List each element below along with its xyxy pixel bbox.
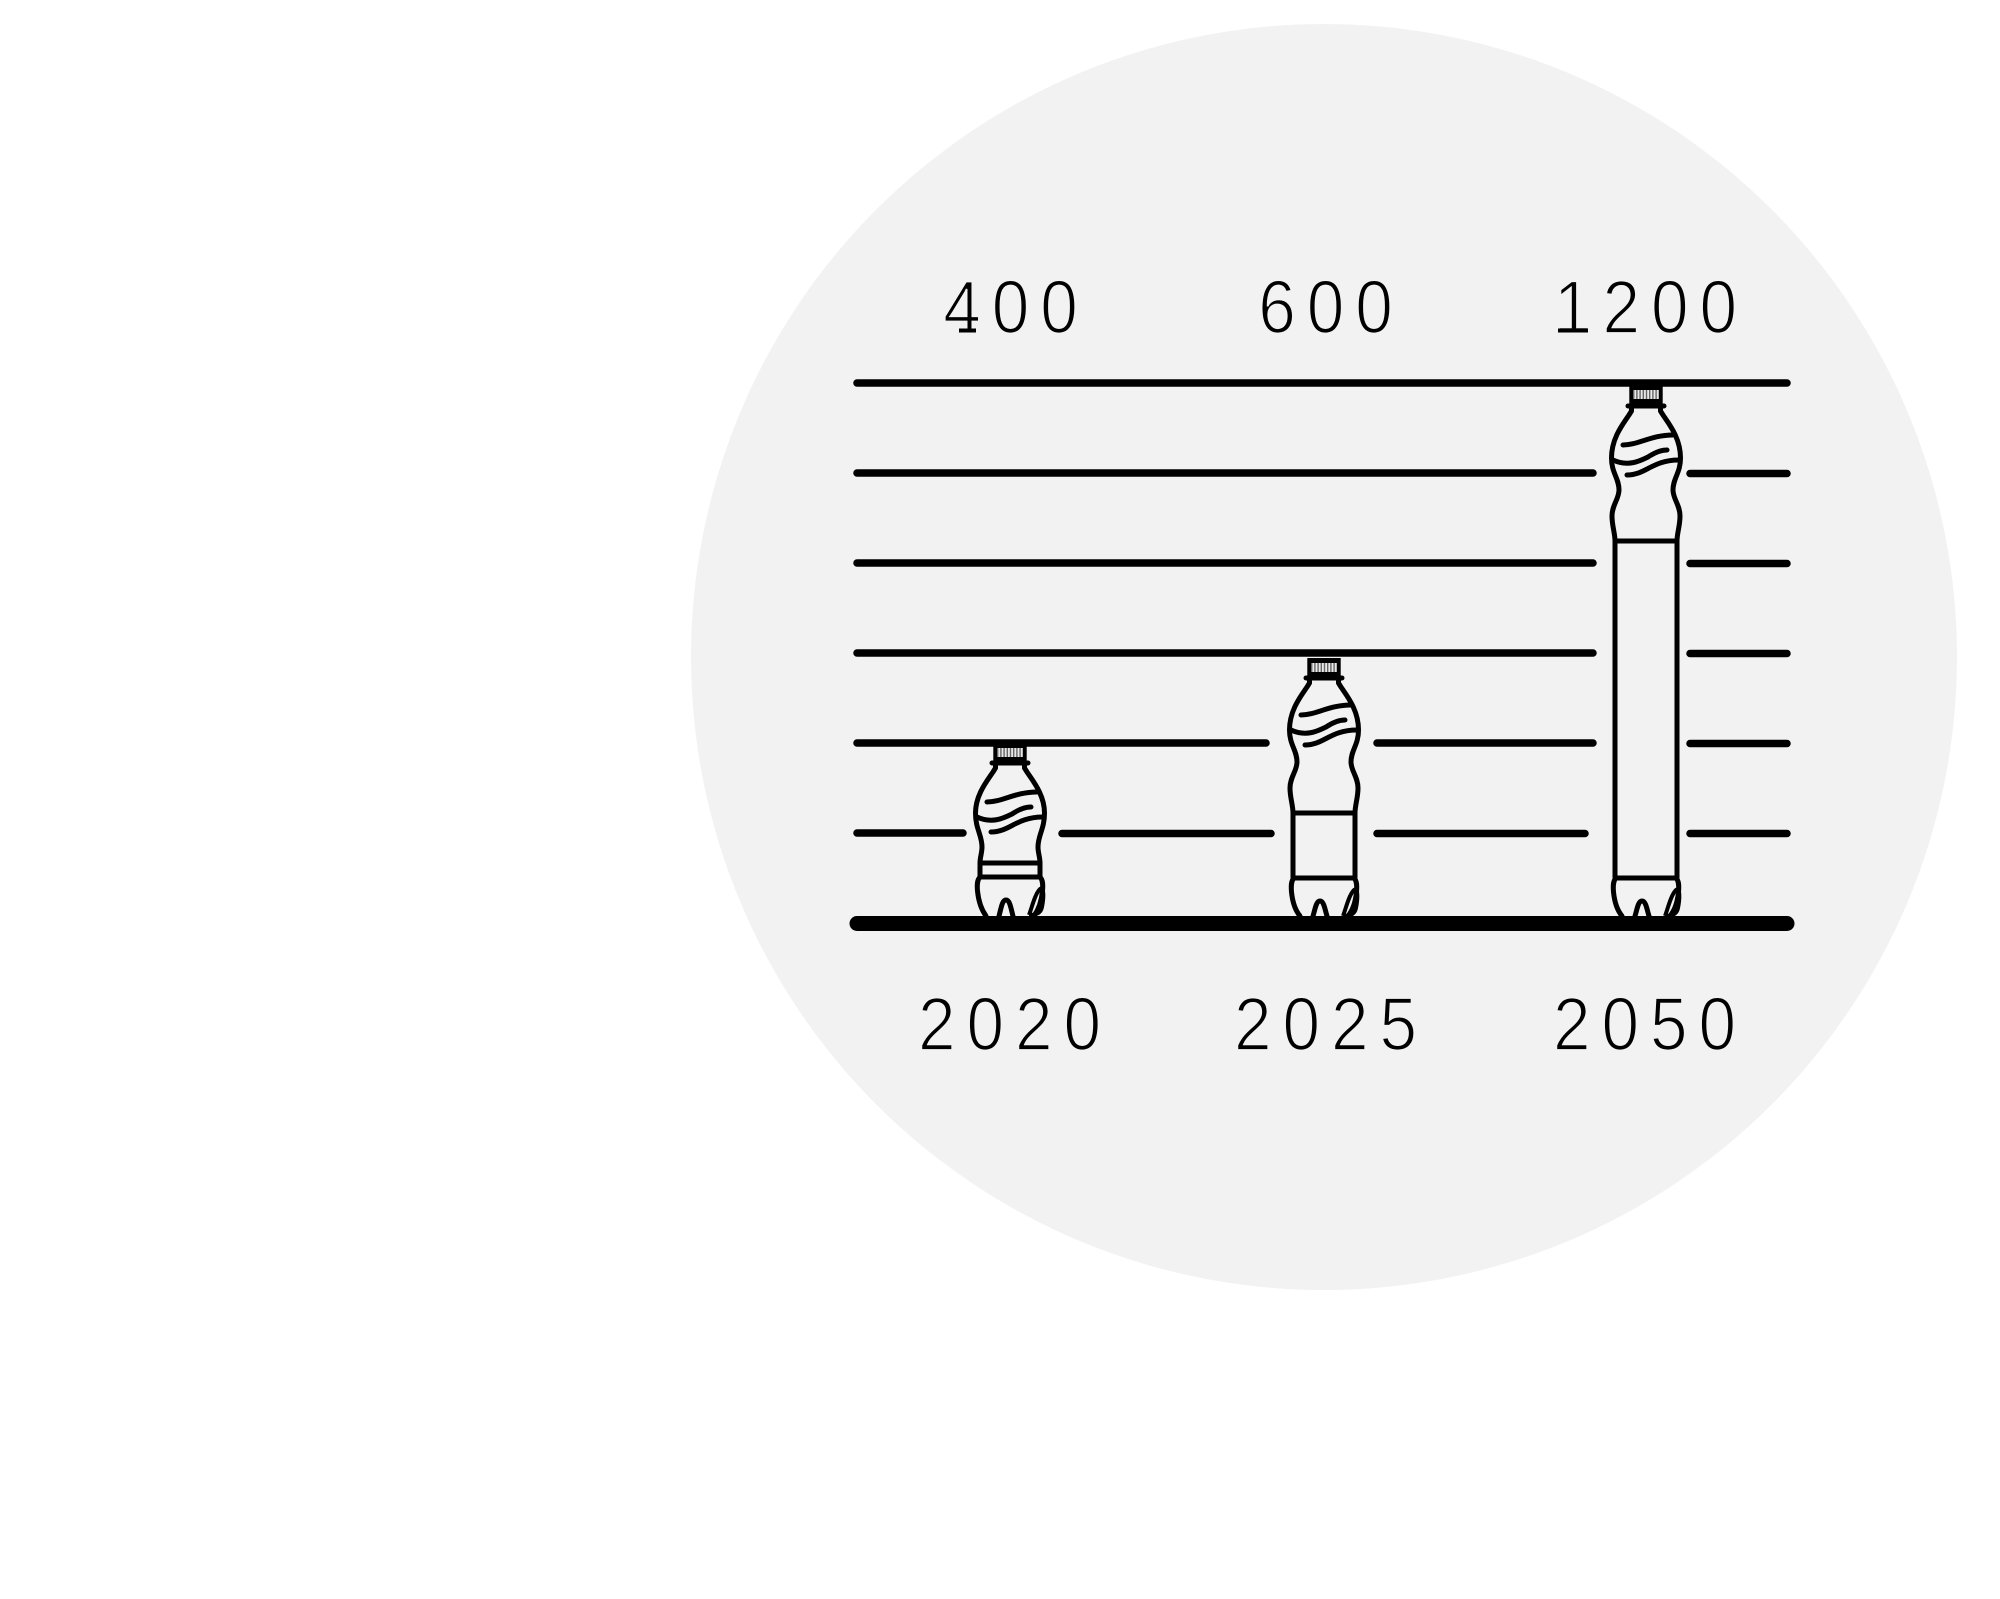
- bottle 2025: [1290, 658, 1358, 916]
- year labels: [918, 983, 1747, 1067]
- value labels: 600: [1258, 266, 1404, 350]
- value labels: 1200: [1554, 266, 1748, 350]
- year labels: 2020: [918, 983, 1112, 1067]
- year labels: 2050: [1553, 983, 1747, 1067]
- year labels: 2025: [1234, 983, 1428, 1067]
- baseline axis: [857, 916, 1787, 931]
- bottle 2050: [1612, 383, 1680, 916]
- value labels: 400: [943, 266, 1089, 350]
- bottle 2020: [976, 743, 1044, 916]
- chart grid lines: [857, 383, 1787, 834]
- value labels: [943, 266, 1748, 350]
- background circle: [691, 24, 1957, 1290]
